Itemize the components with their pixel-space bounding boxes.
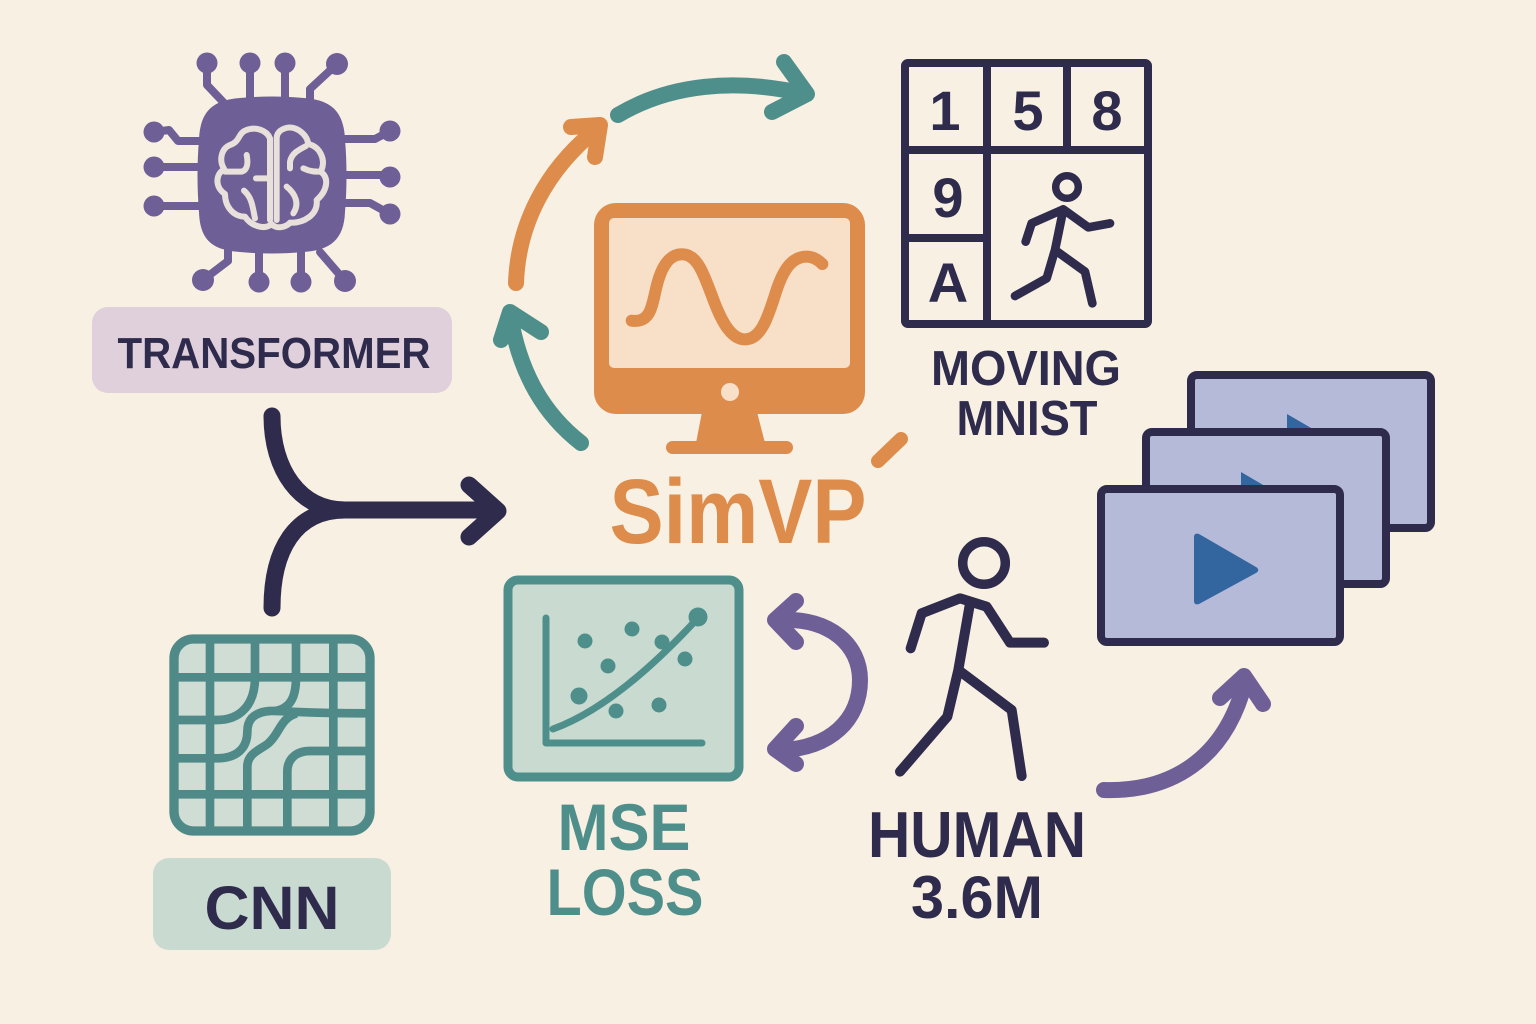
decorative tick: orange <box>878 439 901 461</box>
label: transformer <box>92 307 452 393</box>
title: SimVP: SimVP <box>610 461 866 563</box>
label: human 3.6m <box>868 798 1086 931</box>
label: moving mnist: MNIST <box>956 392 1098 446</box>
icon: moving mnist grid: 8 <box>1091 79 1123 142</box>
arrow: teal lower left cycle <box>501 312 581 443</box>
icon: moving mnist grid: 9 <box>932 166 964 229</box>
icon: mse loss chart <box>508 580 739 777</box>
icon: walking human <box>900 542 1044 776</box>
label: mse loss: LOSS <box>546 855 704 929</box>
icon: transformer chip with brain <box>144 52 400 292</box>
label: moving mnist <box>931 342 1121 446</box>
icon: moving mnist grid: 1 <box>929 79 961 142</box>
arrow: purple human to video <box>1104 676 1263 790</box>
label: human 3.6m: HUMAN <box>868 798 1086 871</box>
icon: moving mnist grid: 5 <box>1012 79 1044 142</box>
icon: moving mnist grid: A <box>928 251 968 314</box>
arrow: merge of transformer and cnn into SimVP <box>272 416 498 608</box>
arrow: teal top cycle <box>618 62 807 115</box>
label: mse loss <box>546 790 704 929</box>
icon: stacked video frames <box>1101 375 1431 642</box>
icon: cnn grid <box>174 639 370 831</box>
label: cnn: CNN <box>204 874 340 942</box>
icon: SimVP monitor with wave <box>594 203 865 454</box>
label: transformer: TRANSFORMER <box>118 329 430 378</box>
label: cnn <box>153 858 391 950</box>
icon: moving mnist grid <box>905 63 1148 324</box>
arrow: purple two-way curve <box>775 601 860 764</box>
label: moving mnist: MOVING <box>931 342 1121 396</box>
arrow: orange cycle <box>516 125 600 283</box>
label: human 3.6m: 3.6M <box>911 864 1043 931</box>
label: mse loss: MSE <box>558 790 690 864</box>
